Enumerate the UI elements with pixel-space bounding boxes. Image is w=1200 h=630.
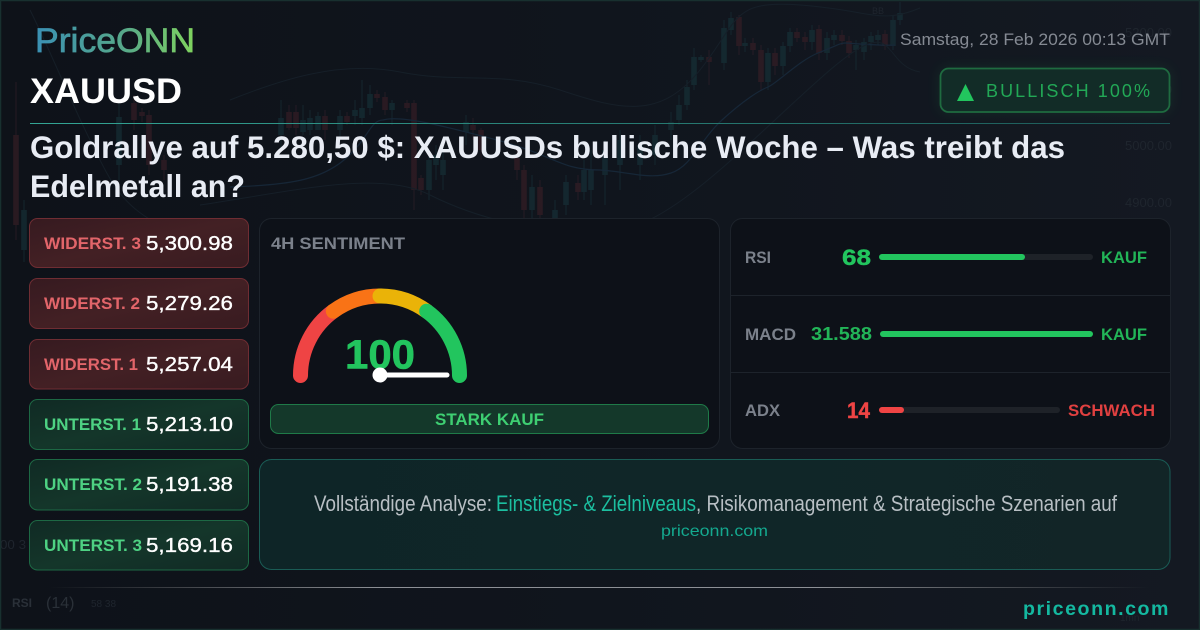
support 2: UNTERST. 2 xyxy=(44,475,142,494)
green candle bodies xyxy=(24,13,900,250)
indicator: RSI: 68 xyxy=(842,245,871,270)
call to action text: Einstiegs- & Zielniveaus xyxy=(496,491,696,516)
resistance 1: WIDERST. 1 xyxy=(44,355,138,374)
gauge xyxy=(300,296,460,382)
timestamp: Samstag, 28 Feb 2026 00:13 GMT xyxy=(900,31,1170,49)
red candle wicks xyxy=(16,15,885,240)
faint axis labels: RSI xyxy=(12,596,32,610)
panel: support and resistance levels xyxy=(30,218,248,570)
indicator: MACD: 31.588 xyxy=(811,324,872,344)
resistance 1: 5,257.04 xyxy=(146,354,233,376)
icon: up triangle xyxy=(957,84,974,101)
resistance 3: WIDERST. 3 xyxy=(44,234,141,253)
support 2 xyxy=(30,460,248,510)
faint axis labels: 1mn xyxy=(1120,613,1139,624)
panel heading: 4H SENTIMENT xyxy=(271,235,405,253)
resistance 3: 5,300.98 xyxy=(146,233,233,255)
resistance 2: 5,279.26 xyxy=(146,293,233,315)
symbol: XAUUSD: XAUUSD xyxy=(30,72,182,111)
indicator: RSI: RSI xyxy=(745,249,771,267)
badge: bullish 100%: BULLISCH 100% xyxy=(986,81,1150,101)
resistance 1 xyxy=(30,340,248,389)
header divider xyxy=(30,123,1170,124)
indicator: RSI: KAUF xyxy=(1101,248,1147,267)
resistance 2 xyxy=(30,278,248,328)
faint axis labels: 58 38 xyxy=(91,599,116,610)
green candle wicks xyxy=(24,2,900,262)
indicator: ADX: SCHWACH xyxy=(1068,401,1155,420)
support 2: 5,191.38 xyxy=(146,474,233,496)
bollinger lower band xyxy=(200,42,920,233)
call to action text: Vollständige Analyse: xyxy=(314,491,492,516)
badge: bullish 100% xyxy=(940,68,1170,112)
faint axis labels: 5200.00 xyxy=(1125,25,1172,40)
footer divider xyxy=(50,587,1150,588)
resistance 2: WIDERST. 2 xyxy=(44,294,140,313)
support 1: 5,213.10 xyxy=(146,414,233,436)
faint axis labels: 4900.00 xyxy=(1125,195,1172,210)
faint axis labels: 5000.00 xyxy=(1125,138,1172,153)
panel: indicators xyxy=(730,218,1170,448)
support 1: UNTERST. 1 xyxy=(44,415,141,434)
support 1 xyxy=(30,400,248,450)
red candle bodies xyxy=(16,17,885,225)
indicator: MACD: MACD xyxy=(745,326,796,344)
gauge value: 100 xyxy=(345,332,415,378)
verdict bar: STARK KAUF xyxy=(435,410,544,429)
panel: call to action xyxy=(260,460,1170,570)
indicator: MACD: KAUF xyxy=(1101,325,1147,344)
verdict bar xyxy=(270,404,708,434)
call to action text xyxy=(314,491,1118,516)
resistance 3 xyxy=(30,218,248,268)
logo: PriceONN: PriceONN xyxy=(35,22,195,60)
support 3: UNTERST. 3 xyxy=(44,536,142,555)
indicator: ADX: 14 xyxy=(847,398,871,423)
indicator: RSI xyxy=(745,245,1147,270)
background candlestick chart xyxy=(16,2,920,262)
support 3: 5,169.16 xyxy=(146,535,233,557)
panel: 4H sentiment xyxy=(260,218,720,448)
indicator: ADX: ADX xyxy=(745,402,780,420)
bollinger upper band xyxy=(30,4,920,225)
faint axis labels: 5100.00 xyxy=(1125,82,1172,97)
support 3 xyxy=(30,520,248,570)
faint axis labels: (14) xyxy=(46,595,74,612)
headline: Edelmetall an? xyxy=(30,168,245,204)
headline xyxy=(30,129,1065,204)
gauge needle xyxy=(372,368,447,382)
headline: Goldrallye auf 5.280,50 $: XAUUSDs bullische Woche – Was treibt das xyxy=(30,129,1065,165)
call to action text: , Risikomanagement & Strategische Szenarien auf xyxy=(696,491,1118,516)
footer url: priceonn.com xyxy=(1023,599,1170,620)
moving average line xyxy=(230,43,895,187)
call to action link: priceonn.com xyxy=(661,523,768,540)
faint axis labels: 00 3 xyxy=(0,537,26,552)
indicator: MACD xyxy=(745,324,1147,344)
indicator: ADX xyxy=(745,398,1155,423)
faint axis labels: BB xyxy=(872,6,884,16)
